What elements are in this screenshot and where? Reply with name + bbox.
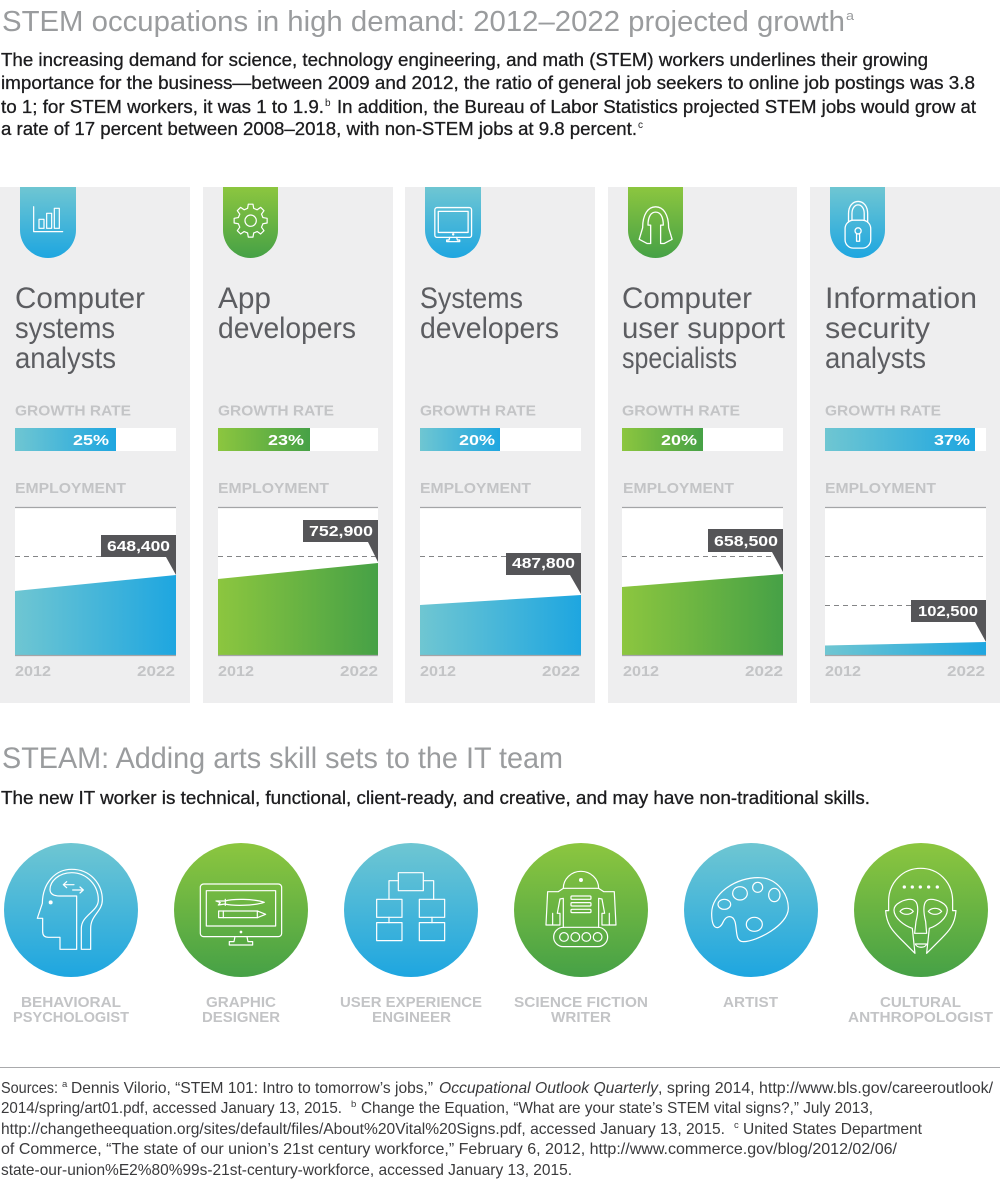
label: CULTURAL [880,994,961,1011]
label: ARTIST [723,994,778,1011]
employment chart: 2022 [137,663,175,680]
panel heading: Computer [622,282,752,315]
sources footnote: 2014/spring/art01.pdf, accessed January 13, 2015. [1,1100,342,1117]
sources footnote: Change the Equation, “What are your state’s STEM vital signs?,” July 2013, [361,1100,873,1117]
title: a [846,8,855,23]
employment chart: 2012 [623,663,659,680]
employment chart [15,480,176,680]
label [340,994,482,1026]
employment chart: 2022 [542,663,580,680]
heading: STEAM: STEAM: Adding arts skill sets to the IT team [2,742,563,775]
panel: app developers [203,187,393,703]
icon: monitor badge [425,187,481,258]
icon: monitor with brush and pencil [174,843,308,977]
panel: systems developers [405,187,595,703]
employment chart: 487,800 [512,555,575,572]
label: PSYCHOLOGIST [13,1009,129,1026]
employment chart: 2012 [15,663,51,680]
growth rate bar [622,402,783,451]
panel heading: security [825,312,930,345]
icon: flow diagram [344,843,478,977]
icon: robot [514,843,648,977]
sources footnote: c [734,1120,739,1131]
panel heading [15,282,145,375]
role: user experience engineer [340,843,482,1026]
panel heading: specialists [622,342,737,375]
employment chart [622,480,783,680]
growth rate bar: 23% [268,432,304,449]
panel heading: analysts [15,342,116,375]
panel heading: Computer [15,282,145,315]
role: behavioral psychologist [4,843,138,1026]
employment chart: 2022 [947,663,985,680]
label: ENGINEER [372,1009,451,1026]
intro text: to 1; for STEM workers, it was 1 to 1.9. [1,96,324,117]
intro text: a rate of 17 percent between 2008–2018, with non-STEM jobs at 9.8 percent. [1,118,637,139]
icon: bar chart badge [20,187,76,258]
growth rate bar [15,402,176,451]
intro text: c [638,120,643,131]
role: science fiction writer [514,843,648,1026]
employment chart: 2012 [420,663,456,680]
employment chart: 102,500 [918,603,978,620]
employment chart [420,480,581,680]
employment chart: EMPLOYMENT [420,480,531,497]
panel heading: Systems [420,282,523,315]
employment chart: 2012 [825,663,861,680]
panel heading [218,282,356,345]
panel heading: developers [218,312,356,345]
employment chart [218,480,378,680]
panel heading [420,282,559,345]
label [13,994,129,1026]
panel heading: developers [420,312,559,345]
growth rate bar [420,402,581,451]
growth rate bar: 25% [73,432,109,449]
employment chart: EMPLOYMENT [825,480,936,497]
intro text: The increasing demand for science, technology engineering, and math (STEM) workers underlines their growing [1,49,928,70]
growth rate bar: GROWTH RATE [15,402,131,420]
panel heading: user support [622,312,786,345]
sources footnote: Dennis Vilorio, “STEM 101: Intro to tomorrow’s jobs,” [71,1080,433,1097]
label [514,994,648,1026]
role: graphic designer [174,843,308,1026]
employment chart: 2022 [340,663,378,680]
employment chart: 752,900 [309,523,373,540]
intro text: In addition, the Bureau of Labor Statistics projected STEM jobs would grow at [337,96,976,117]
icon: tribal mask [854,843,988,977]
employment chart: 658,500 [714,533,778,550]
sources footnote: state-our-union%E2%80%99s-21st-century-workforce, accessed January 13, 2015. [1,1162,572,1179]
panel: computer systems analysts [0,187,190,703]
role: artist [684,843,818,1011]
label [848,994,993,1026]
icon: padlock badge [830,187,885,258]
panel heading: analysts [825,342,926,375]
label: USER EXPERIENCE [340,994,482,1011]
intro text [1,49,976,139]
panel heading [825,282,977,375]
role: cultural anthropologist [848,843,993,1026]
title: STEM occupations in high demand: 2012–2022 projected growth [2,6,845,38]
sources footnote: http://changetheequation.org/sites/default/files/About%20Vital%20Signs.pdf, accessed January 13, 2015. [1,1121,725,1138]
employment chart: EMPLOYMENT [623,480,734,497]
panel heading [622,282,786,375]
employment chart: 648,400 [107,538,170,555]
panel heading: Information [825,282,977,315]
icon: headset badge [628,187,683,258]
label: BEHAVIORAL [21,994,121,1011]
employment chart [825,480,986,680]
employment chart: 2012 [218,663,254,680]
sources footnote: Sources: [1,1080,58,1097]
sources footnote: , spring 2014, http://www.bls.gov/careeroutlook/ [658,1080,994,1097]
employment chart: EMPLOYMENT [15,480,126,497]
label: SCIENCE FICTION [514,994,648,1011]
sources footnote: b [351,1099,356,1110]
icon: gear badge [223,187,278,258]
label: DESIGNER [202,1009,280,1026]
STEAM subheading: The new IT worker is technical, functional, client-ready, and creative, and may have non-traditional skills. [1,787,870,808]
growth rate bar [825,402,986,451]
intro text: importance for the business—between 2009 and 2012, the ratio of general job seekers to online job postings was 3.8 [1,72,975,93]
intro text: b [325,98,331,109]
label: GRAPHIC [206,994,276,1011]
panel: computer user support specialists [608,187,797,703]
sources footnote: a [62,1079,68,1090]
sources footnote: Occupational Outlook Quarterly [439,1080,659,1097]
employment chart: EMPLOYMENT [218,480,329,497]
growth rate bar: GROWTH RATE [622,402,740,420]
growth rate bar: 37% [934,432,970,449]
growth rate bar: GROWTH RATE [825,402,941,420]
employment chart: 2022 [745,663,783,680]
label [202,994,280,1026]
icon: palette [684,843,818,977]
icon: head with brain [4,843,138,977]
sources footnote: of Commerce, “The state of our union’s 21st century workforce,” February 6, 2012, http://www.commerce.gov/blog/2012/02/06/ [1,1141,898,1158]
sources footnote: United States Department [743,1121,923,1138]
growth rate bar [218,402,378,451]
label: ANTHROPOLOGIST [848,1009,993,1026]
panel heading: systems [15,312,115,345]
label: WRITER [551,1009,611,1026]
growth rate bar: GROWTH RATE [218,402,334,420]
panel: information security analysts [810,187,1000,703]
growth rate bar: 20% [661,432,697,449]
sources footnote [1,1079,994,1179]
growth rate bar: 20% [459,432,495,449]
growth rate bar: GROWTH RATE [420,402,536,420]
panel heading: App [218,282,271,315]
